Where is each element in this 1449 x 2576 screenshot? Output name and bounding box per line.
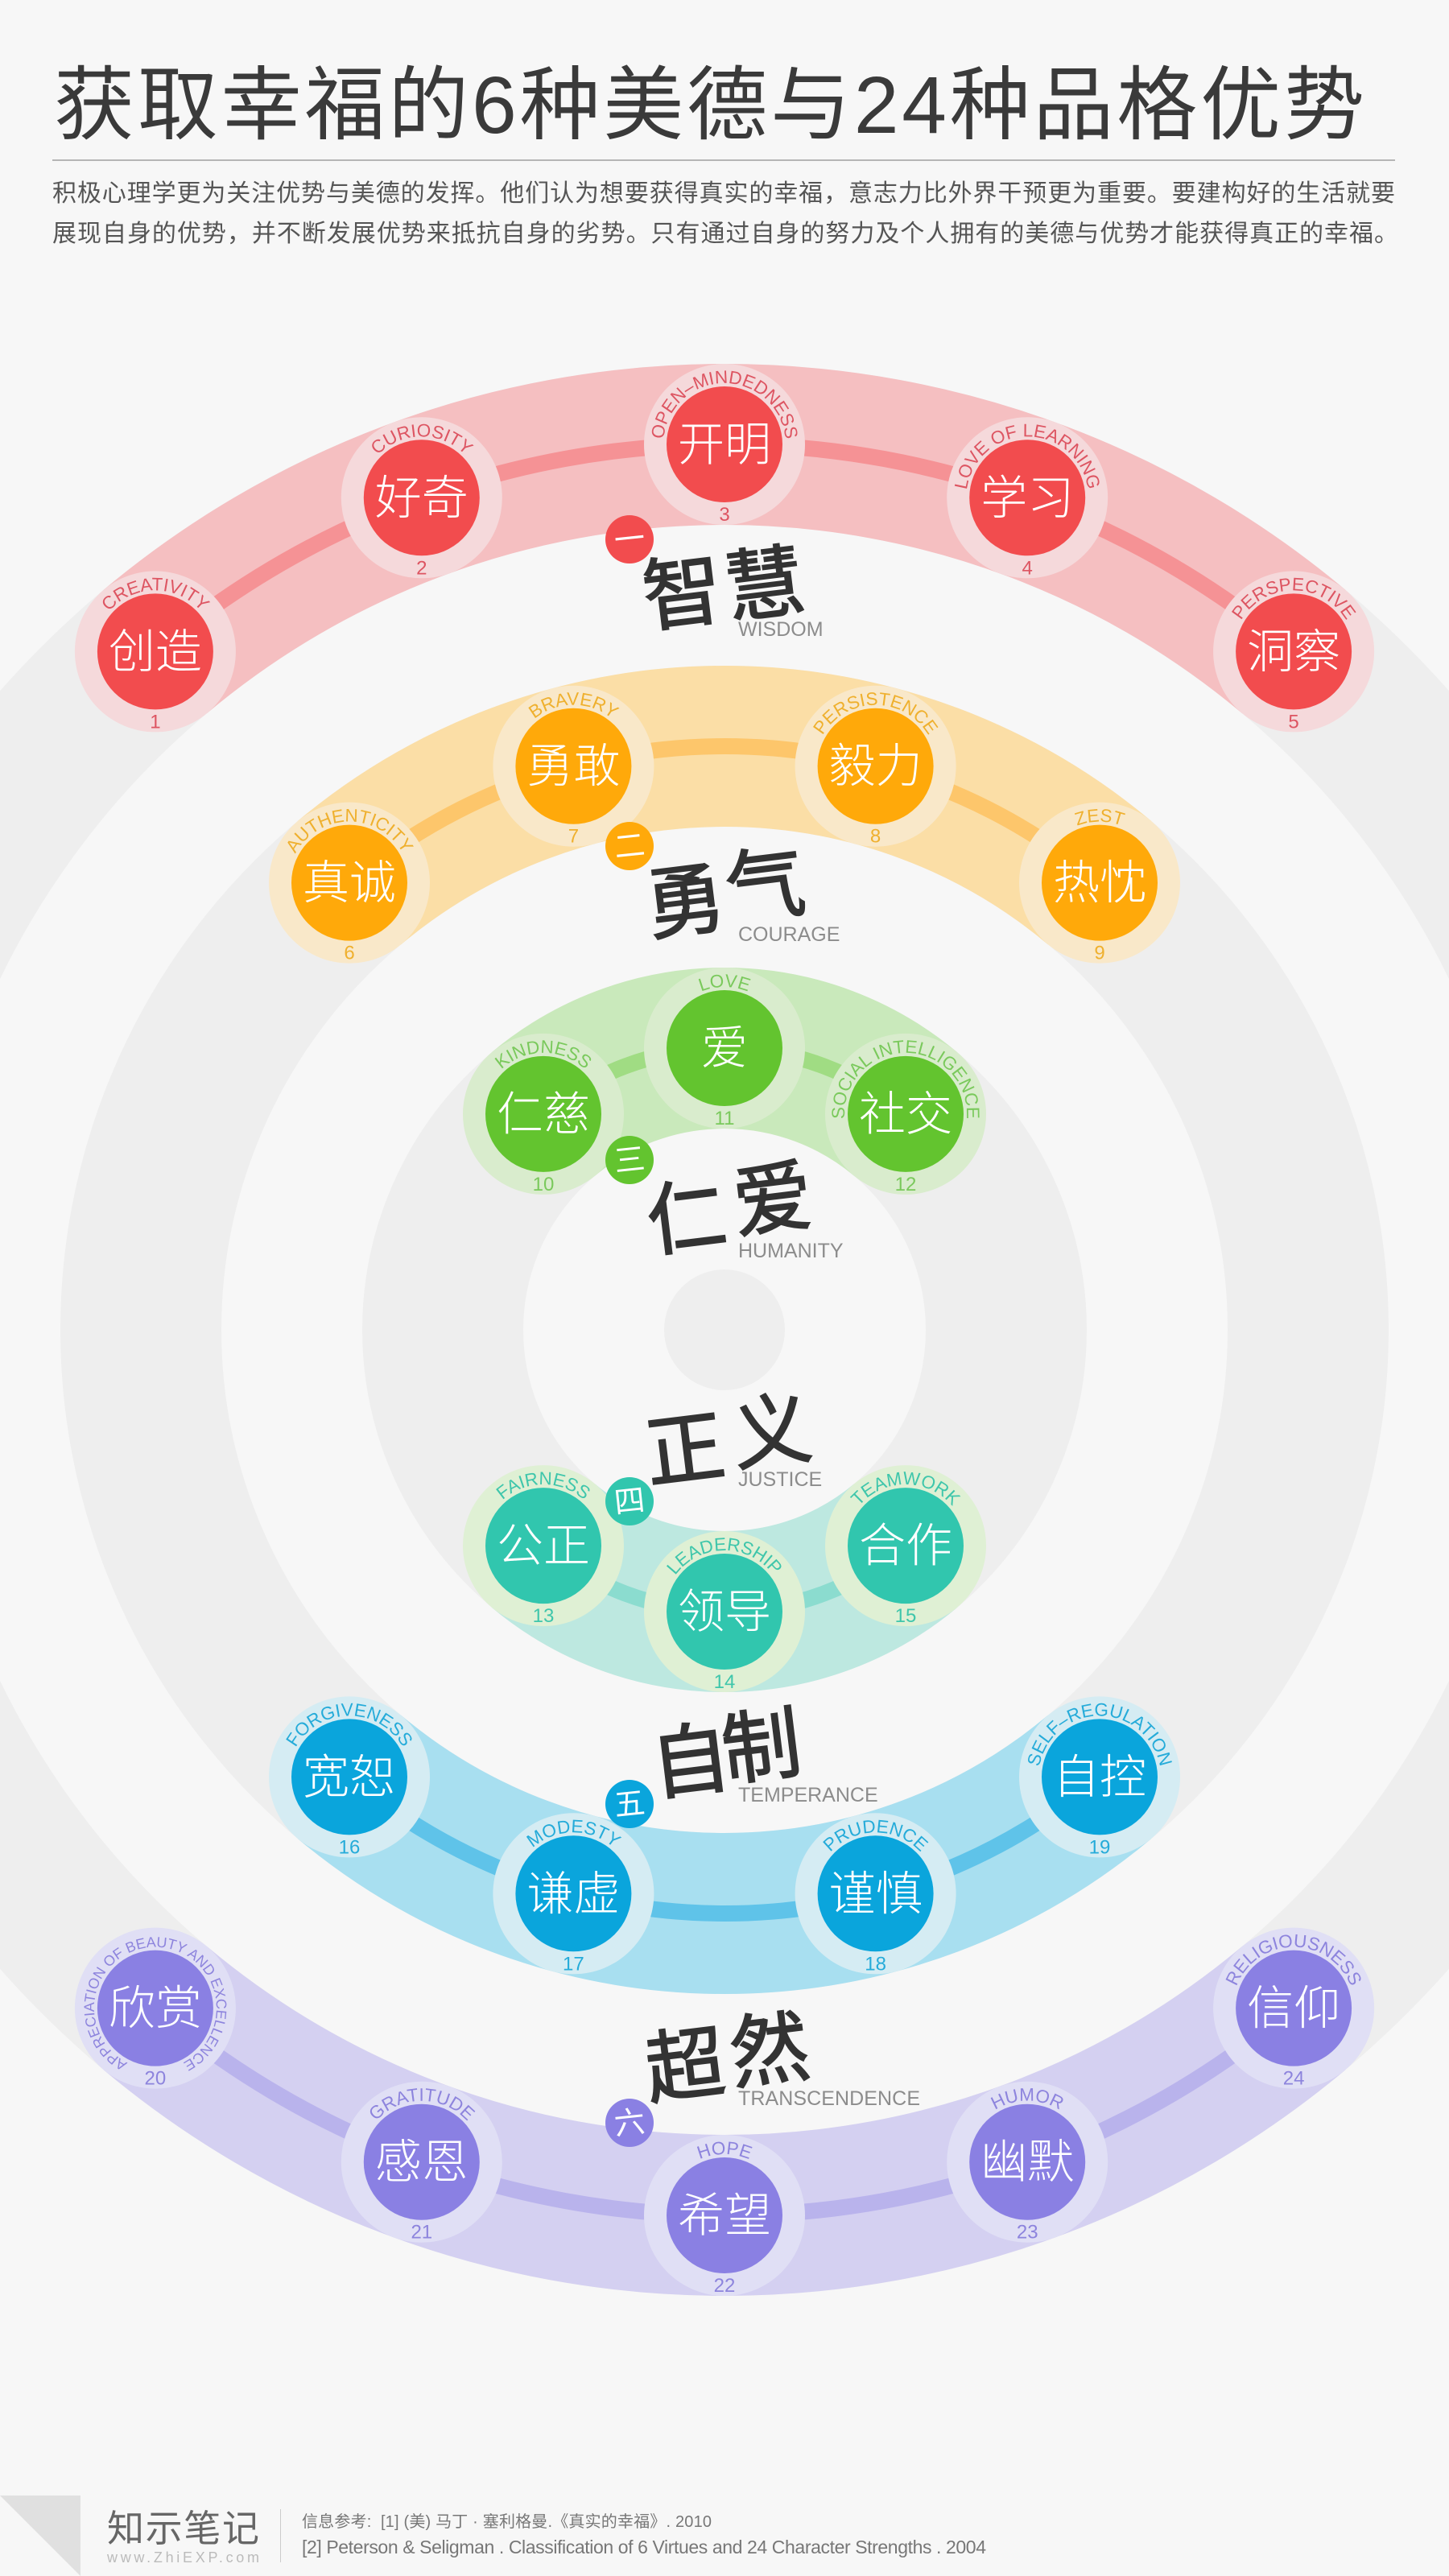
node: love: 11	[715, 1108, 734, 1129]
footer logo: 知示笔记	[107, 2508, 259, 2549]
node: curiosity	[341, 417, 502, 579]
node: forgiveness: FORGIVENESS	[286, 1703, 412, 1747]
node: gratitude: 21	[411, 2222, 432, 2244]
node: leadership: LEADERSHIP	[667, 1538, 781, 1575]
node: self-regulation: 自控	[1053, 1751, 1146, 1803]
node: open-mindedness	[644, 364, 805, 526]
node: persistence	[795, 686, 956, 848]
node: curiosity: CURIOSITY	[372, 423, 473, 452]
footer references: [2] Peterson & Seligman . Classification of 6 Virtues and 24 Character Strengths . 2004	[302, 2537, 986, 2557]
heading: humanity: 爱	[726, 1132, 818, 1255]
node: persistence: PERSISTENCE	[813, 692, 939, 735]
badge: one: 一	[613, 522, 646, 559]
panel: transcendence	[75, 1928, 1374, 2297]
badge: three: 三	[613, 1142, 646, 1179]
node: hope: 22	[714, 2275, 735, 2297]
heading: wisdom: WISDOM	[738, 618, 824, 641]
node: teamwork: 合作	[859, 1520, 952, 1572]
node: zest: ZEST	[1075, 809, 1125, 826]
heading: transcendence	[638, 1983, 920, 2121]
heading: courage: COURAGE	[738, 923, 840, 946]
node: gratitude	[341, 2082, 502, 2244]
node: forgiveness	[269, 1696, 430, 1858]
node: authenticity: AUTHENTICITY	[287, 809, 414, 853]
node: modesty: MODESTY	[526, 1819, 621, 1847]
heading: temperance: 制	[715, 1679, 807, 1802]
node: persistence: 8	[870, 826, 881, 848]
node: fairness	[463, 1465, 624, 1627]
node: modesty: 17	[563, 1953, 584, 1975]
footer corner triangle	[0, 2496, 80, 2576]
node: fairness: 公正	[497, 1520, 590, 1572]
node: love of learning	[947, 417, 1108, 579]
heading: wisdom	[636, 517, 824, 649]
node: appreciation of beauty and excellence: APPRECIATION OF BEAUTY AND EXCELLENCE	[84, 1937, 227, 2070]
node: perspective: 5	[1288, 711, 1299, 733]
node: bravery: 勇敢	[526, 741, 620, 793]
footer logo: www.ZhiEXP.com	[106, 2549, 259, 2566]
node: social intelligence: 12	[895, 1174, 916, 1195]
heading: temperance: 自	[644, 1694, 736, 1817]
node: love: 爱	[701, 1022, 748, 1075]
node: humor: 幽默	[980, 2136, 1074, 2189]
heading: courage: 气	[719, 818, 811, 941]
node: bravery: 7	[568, 826, 579, 848]
heading: humanity: 仁	[640, 1150, 732, 1274]
node: modesty	[493, 1813, 654, 1975]
node: prudence	[795, 1813, 956, 1975]
node: fairness: FAIRNESS	[496, 1472, 589, 1499]
node: love: LOVE	[699, 974, 750, 992]
node: authenticity: 6	[344, 943, 355, 964]
badge: two: 二	[613, 828, 646, 865]
node: forgiveness: 宽恕	[303, 1751, 396, 1803]
node: leadership	[644, 1531, 805, 1693]
heading: justice: JUSTICE	[738, 1468, 822, 1491]
badge: two	[605, 822, 654, 870]
node: perspective: 洞察	[1247, 625, 1340, 678]
node: love of learning: 学习	[980, 472, 1074, 524]
node: love of learning: LOVE OF LEARNING	[955, 423, 1100, 489]
node: authenticity: 真诚	[303, 857, 396, 910]
node: social intelligence: 社交	[859, 1088, 952, 1141]
badge: one	[605, 515, 654, 564]
badge: four	[605, 1477, 654, 1525]
node: teamwork: 15	[895, 1605, 916, 1627]
node: open-mindedness: 3	[719, 504, 730, 526]
node: creativity: CREATIVITY	[103, 578, 211, 609]
node: kindness: 10	[533, 1174, 554, 1195]
heading: transcendence: TRANSCENDENCE	[738, 2087, 920, 2110]
node: prudence: 18	[865, 1953, 886, 1975]
heading: wisdom: 慧	[718, 517, 810, 640]
badge: six: 六	[613, 2105, 646, 2142]
node: curiosity: 2	[416, 557, 427, 579]
node: prudence: 谨慎	[829, 1868, 923, 1920]
node: zest: 热忱	[1053, 857, 1146, 910]
heading: courage	[639, 818, 840, 957]
node: authenticity	[269, 803, 430, 964]
heading: humanity: HUMANITY	[738, 1240, 844, 1262]
node: love of learning: 4	[1022, 557, 1033, 579]
node: self-regulation	[1019, 1696, 1180, 1858]
node: religiousness: 信仰	[1247, 1983, 1340, 2035]
node: social intelligence	[825, 1034, 986, 1195]
node: creativity: 1	[150, 711, 161, 733]
node: kindness	[463, 1034, 624, 1195]
node: humor	[947, 2082, 1108, 2244]
heading: transcendence: 超	[638, 1998, 730, 2121]
badge: five: 五	[613, 1786, 646, 1823]
node: persistence: 毅力	[829, 741, 923, 793]
heading: temperance: TEMPERANCE	[738, 1784, 878, 1806]
node: forgiveness: 16	[339, 1836, 360, 1858]
node: religiousness: RELIGIOUSNESS	[1222, 1930, 1366, 1988]
node: kindness: KINDNESS	[494, 1040, 591, 1069]
node: religiousness	[1213, 1928, 1374, 2090]
node: creativity	[75, 571, 236, 733]
node: gratitude: 感恩	[375, 2136, 469, 2189]
node: creativity: 创造	[109, 625, 202, 678]
node: bravery	[493, 686, 654, 848]
panel: humanity	[463, 968, 986, 1195]
node: leadership: 领导	[678, 1586, 771, 1638]
node: gratitude: GRATITUDE	[370, 2088, 475, 2120]
heading: temperance	[644, 1679, 878, 1817]
node: zest	[1019, 803, 1180, 964]
heading: humanity	[640, 1132, 844, 1274]
node: teamwork: TEAMWORK	[850, 1472, 961, 1506]
title: 获取幸福的6种美德与24种品格优势	[54, 60, 1364, 151]
panel: wisdom	[75, 364, 1374, 733]
node: open-mindedness: OPEN–MINDEDNESS	[652, 370, 797, 438]
panel: courage	[269, 686, 1180, 964]
node: self-regulation: 19	[1089, 1836, 1110, 1858]
heading: justice: 义	[725, 1364, 817, 1488]
footer references	[302, 2512, 986, 2557]
node: bravery: BRAVERY	[528, 692, 620, 718]
node: hope	[644, 2135, 805, 2297]
badge: four: 四	[613, 1484, 646, 1521]
node: social intelligence: SOCIAL INTELLIGENCE	[832, 1040, 980, 1118]
footer references: 信息参考: [1] (美) 马丁 · 塞利格曼.《真实的幸福》. 2010	[302, 2512, 712, 2531]
intro text	[52, 180, 1398, 247]
node: perspective: PERSPECTIVE	[1232, 578, 1356, 620]
node: modesty: 谦虚	[526, 1868, 620, 1920]
badge: six	[605, 2099, 654, 2147]
node: curiosity: 好奇	[375, 472, 469, 524]
concentric background rings	[0, 444, 1449, 2215]
badge: five	[605, 1780, 654, 1828]
node: prudence: PRUDENCE	[823, 1819, 929, 1852]
node: hope: HOPE	[697, 2141, 752, 2159]
node: appreciation of beauty and excellence: 欣赏	[109, 1983, 202, 2035]
node: self-regulation: SELF–REGULATION	[1028, 1703, 1172, 1766]
heading: wisdom: 智	[636, 526, 728, 649]
node: love	[644, 968, 805, 1129]
node: open-mindedness: 开明	[678, 419, 771, 471]
heading: courage: 勇	[639, 834, 731, 957]
badge: three	[605, 1136, 654, 1184]
heading: justice	[638, 1364, 822, 1505]
node: humor: 23	[1017, 2222, 1038, 2244]
node: perspective	[1213, 571, 1374, 733]
node: fairness: 13	[533, 1605, 554, 1627]
node: kindness: 仁慈	[497, 1088, 590, 1141]
heading: justice: 正	[638, 1382, 730, 1505]
node: humor: HUMOR	[988, 2085, 1067, 2113]
node: appreciation of beauty and excellence: 20	[145, 2068, 166, 2090]
panel: temperance	[269, 1696, 1180, 1975]
panel: justice	[463, 1465, 986, 1693]
intro text: 积极心理学更为关注优势与美德的发挥。他们认为想要获得真实的幸福，意志力比外界干预更为重要。要建构好的生活就要	[52, 180, 1395, 207]
intro text: 展现自身的优势，并不断发展优势来抵抗自身的劣势。只有通过自身的努力及个人拥有的美德与优势才能获得真正的幸福。	[52, 221, 1398, 247]
node: zest: 9	[1094, 943, 1105, 964]
heading: transcendence: 然	[723, 1983, 815, 2106]
node: hope: 希望	[678, 2190, 771, 2242]
node: teamwork	[825, 1465, 986, 1627]
node: religiousness: 24	[1283, 2068, 1304, 2090]
node: leadership: 14	[714, 1671, 735, 1693]
